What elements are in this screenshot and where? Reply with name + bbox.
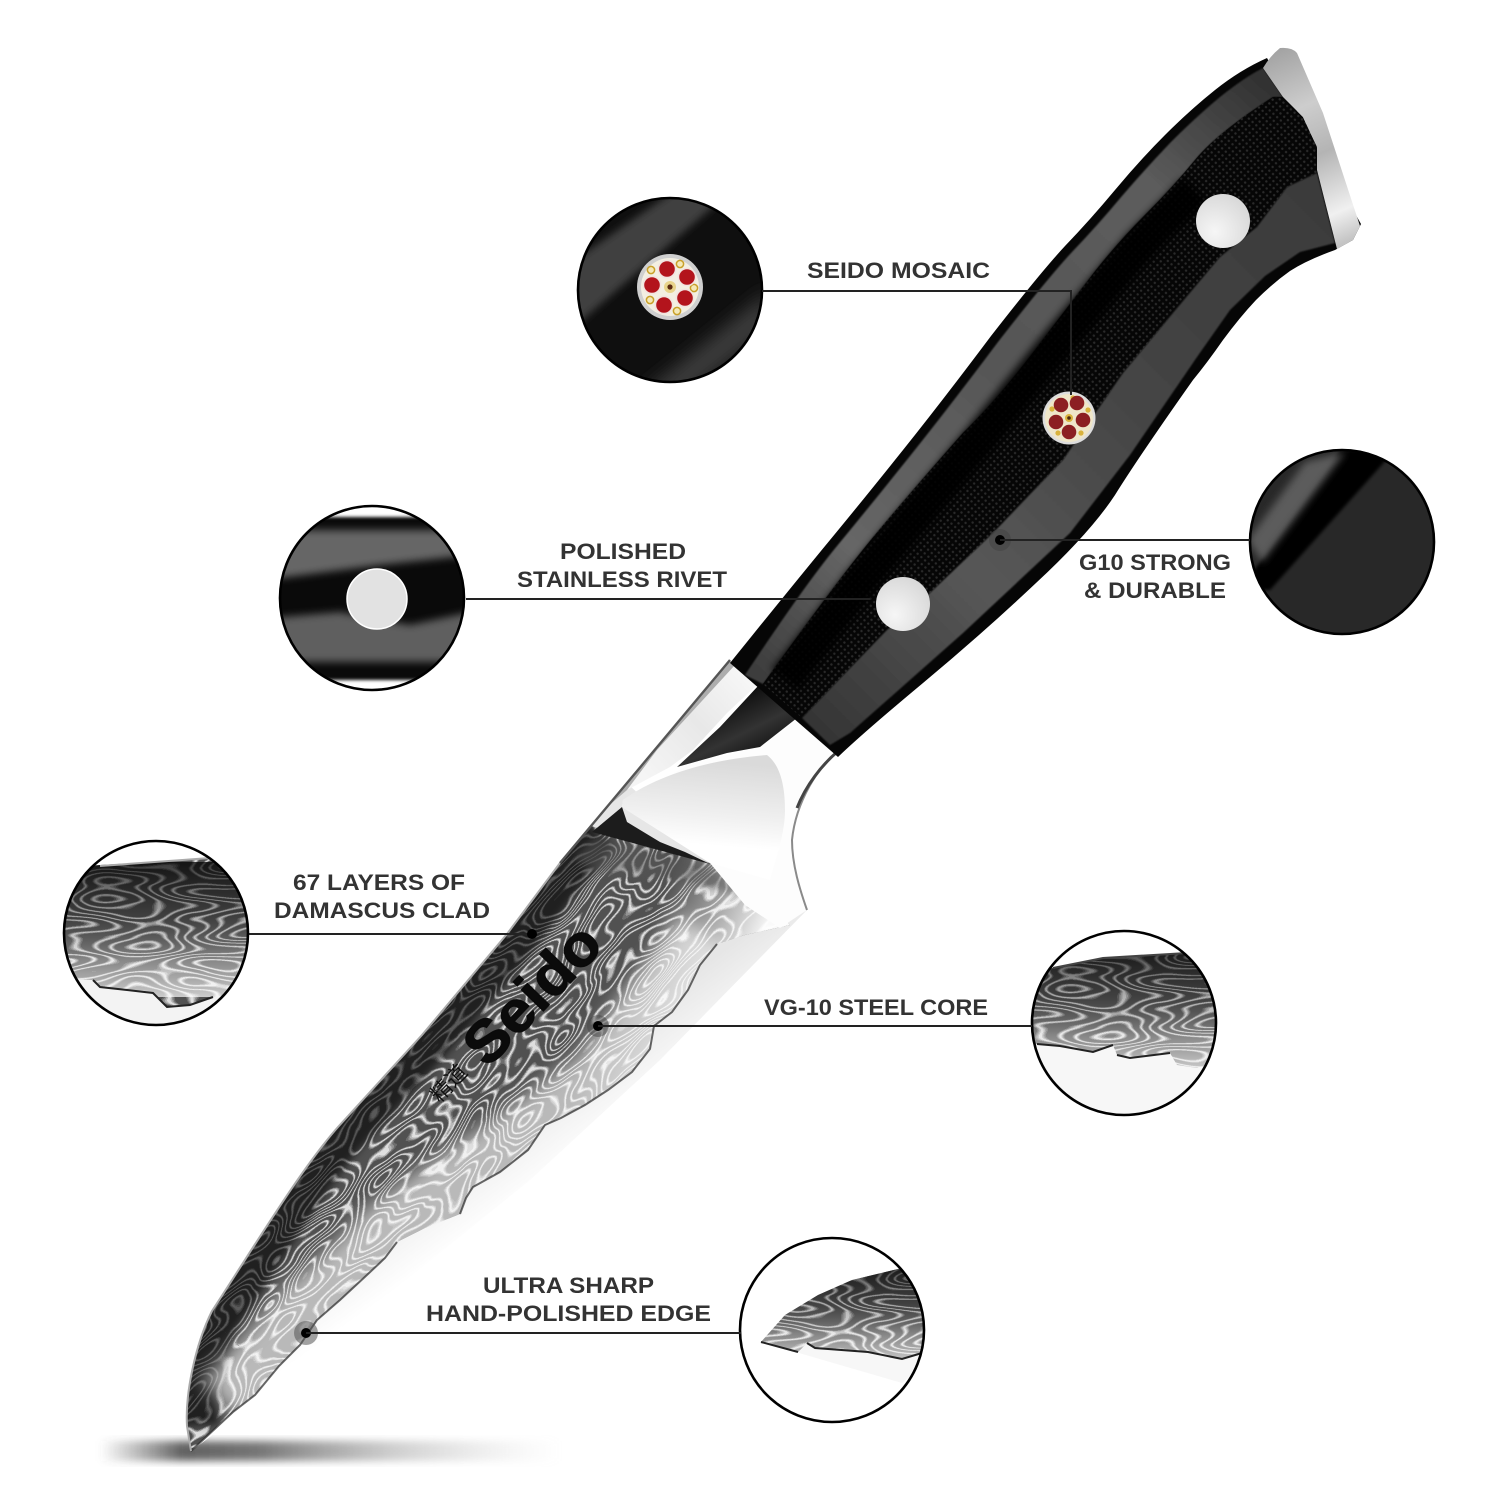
front rivet	[876, 577, 930, 631]
marker dot: damascus	[527, 929, 537, 939]
label: 67 layers of damascus clad: 67 LAYERS OF	[293, 870, 465, 895]
inset: rivet close-up	[278, 504, 466, 692]
hamon line	[191, 944, 717, 1451]
panel: vg-10 core	[587, 930, 1218, 1116]
handle textured centre panel	[763, 97, 1317, 718]
handle lower bevel	[802, 173, 1335, 745]
marker dot: vg-10	[587, 1015, 609, 1037]
leader line: edge	[306, 1332, 741, 1334]
marker dot: g10	[989, 529, 1011, 551]
label: ultra sharp hand-polished edge	[426, 1273, 711, 1326]
bolster spine line	[560, 660, 730, 863]
inset: damascus close-up	[62, 840, 250, 1026]
label: seido mosaic: SEIDO MOSAIC	[807, 258, 990, 283]
label: g10 strong and durable: G10 STRONG	[1079, 550, 1231, 575]
bolster neck outline	[792, 752, 837, 910]
damascus pattern on blade	[187, 826, 790, 1450]
butt cap	[1263, 48, 1360, 249]
inset: edge close-up	[740, 1238, 937, 1422]
label: g10 strong and durable	[1079, 550, 1231, 603]
handle centre panel soft shadow	[785, 190, 1195, 680]
label: g10 strong and durable: & DURABLE	[1084, 578, 1226, 603]
label: ultra sharp hand-polished edge: ULTRA SHARP	[483, 1273, 654, 1298]
panel: seido mosaic	[576, 196, 1072, 395]
leader line: vg-10	[598, 1025, 1032, 1027]
knife illustration	[186, 48, 1361, 1452]
panel: hand-polished edge	[294, 1238, 937, 1422]
leader line: g10	[1000, 539, 1250, 541]
leader line: damascus	[249, 933, 530, 935]
label: ultra sharp hand-polished edge: HAND-POLISHED EDGE	[426, 1301, 711, 1326]
label: polished stainless rivet: STAINLESS RIVET	[517, 567, 728, 592]
kanji mark on blade: 精道	[427, 1061, 472, 1107]
bolster lower body	[622, 720, 837, 928]
blade base with polished edge	[187, 783, 807, 1451]
marker dot: edge	[294, 1321, 318, 1345]
bolster dark wedge	[677, 686, 797, 767]
inset: g10 close-up	[1248, 448, 1436, 636]
bolster facet	[622, 755, 785, 880]
mosaic rivet	[1042, 392, 1096, 444]
inset: mosaic rivet close-up	[576, 196, 764, 384]
bolster top strip	[627, 665, 758, 790]
label: polished stainless rivet	[517, 539, 728, 592]
panel: polished stainless rivet	[270, 500, 870, 700]
label: 67 layers of damascus clad: DAMASCUS CLAD	[274, 898, 490, 923]
rear rivet	[1196, 194, 1250, 248]
panel: damascus clad	[50, 840, 537, 1026]
handle body	[730, 58, 1361, 757]
handle upper bevel	[745, 68, 1283, 684]
label: vg-10 steel core: VG-10 STEEL CORE	[764, 995, 988, 1020]
leader line: seido mosaic	[762, 291, 1071, 395]
ground shadow under knife tip	[100, 1441, 560, 1461]
ricasso shadow below bolster	[575, 836, 745, 895]
panel: g10 handle	[989, 450, 1450, 640]
bolster neck shadow	[797, 752, 837, 808]
Seido logo on blade: Seido	[450, 911, 615, 1078]
leader line: rivet	[466, 598, 870, 600]
spine line	[187, 863, 560, 1451]
bolster spine bevel	[591, 661, 735, 826]
ricasso dark plunge line	[592, 807, 710, 864]
label: polished stainless rivet: POLISHED	[560, 539, 686, 564]
label: 67 layers of damascus clad	[274, 870, 490, 923]
inset: vg-10 close-up	[1030, 930, 1218, 1116]
